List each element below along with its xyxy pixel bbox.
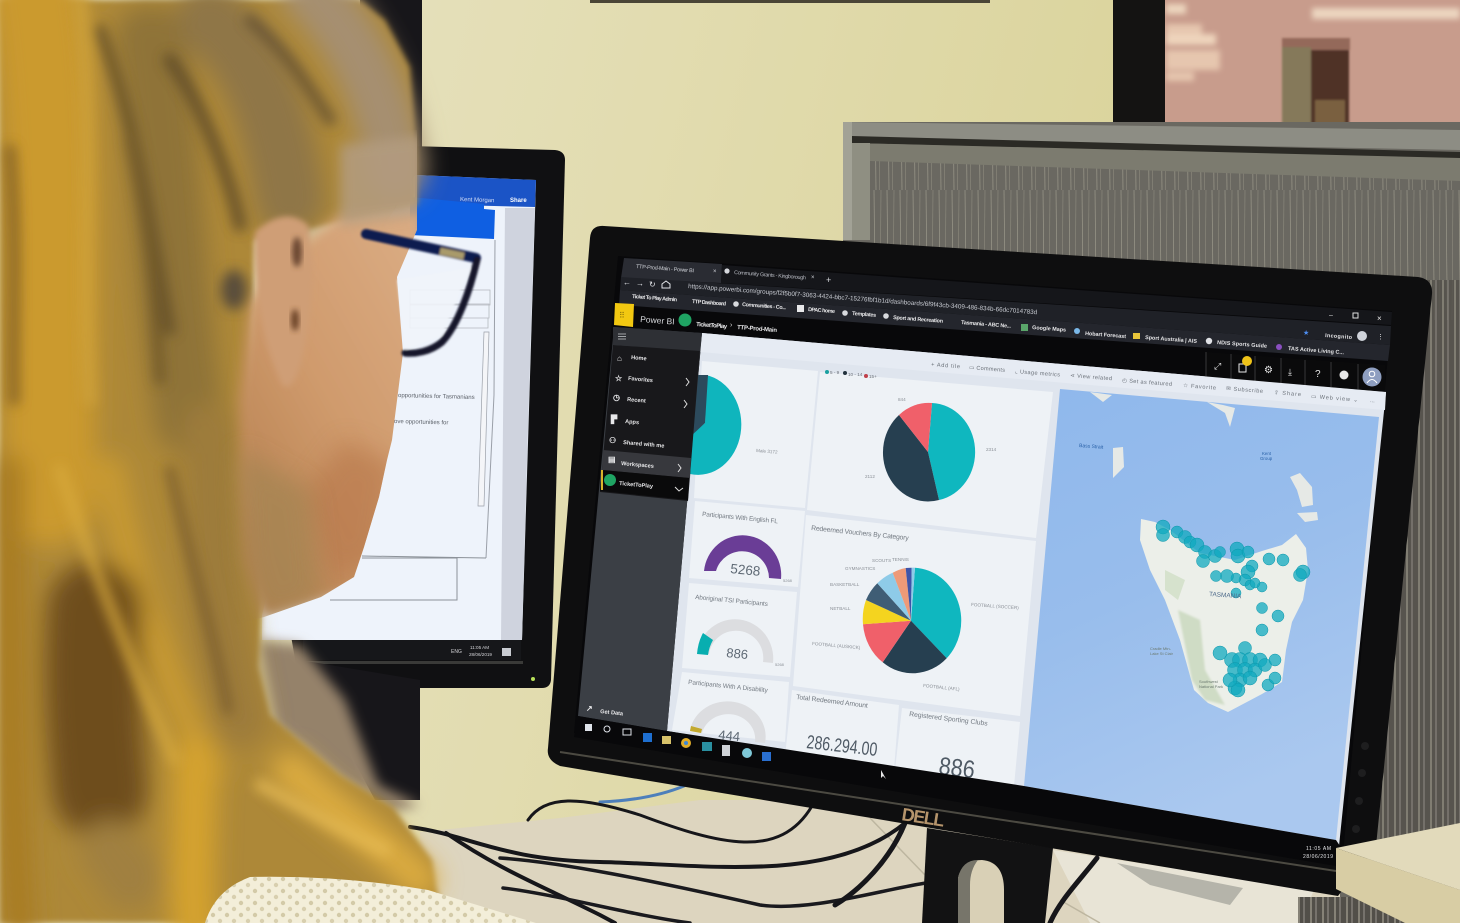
tab strip: × — [713, 269, 717, 275]
tile: registered sporting clubs — [895, 708, 1020, 786]
map tile — [1024, 389, 1379, 840]
tile: redeemed vouchers by category pie: NETBALL — [830, 606, 851, 611]
desk — [420, 800, 1340, 923]
Power BI sidebar: ▛ — [610, 414, 618, 425]
left monitor screen: ove opportunities for — [394, 419, 448, 426]
Power BI sidebar: Shared with me — [623, 440, 665, 450]
tile: participants with English FL gauge: 5268 — [783, 578, 793, 583]
tab strip: TTP-Prod-Main - Power BI — [636, 264, 694, 274]
Windows taskbar — [574, 716, 1340, 866]
left monitor screen: Kent Morgan — [460, 197, 494, 204]
left monitor taskbar: ENG — [451, 649, 462, 655]
tile: gender pie: Male 3172 — [756, 448, 778, 455]
Power BI header: ⠿ — [619, 311, 625, 320]
tile: gender pie — [685, 361, 818, 508]
tile: participants with English FL gauge — [689, 501, 805, 587]
map labels: Lake St Clair — [1150, 651, 1174, 656]
dashboard toolbar: ⇪ Share — [1274, 389, 1301, 398]
bookmarks bar: Communities - Co... — [742, 302, 787, 311]
bezel silver strip — [560, 752, 1336, 871]
left monitor taskbar: 11:05 AM — [470, 645, 489, 650]
dashboard toolbar: ⌞ Usage metrics — [1015, 369, 1060, 379]
left monitor taskbar — [303, 640, 523, 664]
tile: total redeemed amount: Total Redeemed Amount — [796, 694, 868, 710]
bookmarks bar: ⋮ — [1377, 334, 1384, 341]
lace top — [205, 877, 536, 923]
map labels — [1079, 443, 1273, 689]
main monitor stand — [922, 828, 1053, 923]
bookmarks bar: ★ — [1303, 329, 1309, 337]
left monitor bezel — [290, 146, 565, 688]
Power BI sidebar — [578, 327, 702, 731]
Power BI header: › — [730, 322, 733, 329]
address bar: ↻ — [649, 280, 656, 289]
dark post behind head — [360, 0, 422, 160]
Power BI sidebar: ⌂ — [617, 354, 622, 363]
tile: age group pie — [807, 370, 1053, 538]
tile: redeemed vouchers by category pie: BASKETBALL — [830, 582, 860, 587]
shelf edge at the top — [590, 0, 990, 3]
tile: redeemed vouchers by category pie: FOOTBALL (SOCCER) — [971, 602, 1019, 610]
browser chrome — [619, 258, 1392, 361]
tile: redeemed vouchers by category pie: Redeemed Vouchers By Category — [811, 525, 910, 542]
address bar: → — [636, 279, 644, 288]
Power BI sidebar: Favorites — [628, 376, 653, 384]
map labels: Group — [1260, 456, 1273, 461]
bookmarks bar: Tasmania - ABC Ne... — [961, 320, 1012, 330]
tile: total redeemed amount: 286.294.00 — [805, 732, 878, 761]
bookmarks bar: – — [1329, 312, 1333, 319]
tile: redeemed vouchers by category pie: FOOTBALL (AFL) — [923, 683, 960, 692]
address bar — [620, 277, 1391, 345]
bookmarks bar: Google Maps — [1032, 325, 1066, 334]
tile: age group pie: 2314 — [986, 447, 997, 452]
Windows taskbar: 11:05 AM — [1306, 846, 1331, 852]
cables — [410, 786, 1097, 923]
Power BI sidebar: ↗ — [586, 704, 593, 713]
window with brick building — [1160, 0, 1460, 132]
tile: redeemed vouchers by category pie: GYMNASTICS — [845, 566, 875, 571]
tile: registered sporting clubs: Registered Sporting Clubs — [909, 711, 989, 728]
tile: redeemed vouchers by category pie: SCOUTS — [872, 558, 891, 563]
Power BI sidebar: TicketToPlay — [619, 481, 654, 490]
Power BI header — [614, 303, 778, 334]
Power BI sidebar: Recent — [627, 397, 646, 405]
top-right action icons — [1205, 352, 1385, 392]
left monitor screen — [262, 175, 536, 640]
tile: age group pie: 2112 — [865, 474, 875, 479]
Dell logo: DELL — [900, 804, 946, 831]
woman — [0, 0, 536, 923]
tile: Aboriginal TSI participants gauge: Aboriginal TSI Participants — [695, 594, 768, 608]
tile: age group pie: 844 — [898, 397, 906, 402]
map islands — [1090, 392, 1318, 522]
tile: participants with a disability gauge: Participants With A Disability — [688, 679, 769, 694]
bookmarks bar: Sport and Recreation — [893, 315, 943, 325]
bookmarks bar: × — [1377, 314, 1382, 323]
bookmarks bar: TAS Active Living C... — [1288, 346, 1345, 356]
dashboard canvas — [667, 333, 1386, 846]
dashboard toolbar: ☆ Favorite — [1183, 382, 1216, 392]
tile: Aboriginal TSI participants gauge: 886 — [726, 645, 749, 662]
left monitor screen: Share — [510, 198, 527, 204]
cream object lower right — [1336, 823, 1460, 923]
tile: participants with English FL gauge: Participants With English FL — [702, 511, 779, 525]
tile: redeemed vouchers by category pie — [793, 515, 1036, 716]
hair — [0, 0, 448, 923]
dashboard toolbar: ▭ Comments — [969, 365, 1005, 374]
partition wall — [843, 122, 1460, 920]
window frame post — [1113, 0, 1165, 126]
map labels: Cradle Mtn- — [1150, 646, 1172, 651]
Power BI header: Power BI — [640, 314, 675, 327]
map labels: TASMANIA — [1209, 591, 1242, 600]
tab strip: + — [826, 275, 831, 285]
Power BI sidebar: ◷ — [613, 393, 620, 402]
bookmarks bar — [619, 290, 1390, 361]
dashboard toolbar: ◴ Set as featured — [1122, 378, 1172, 388]
address bar: ← — [623, 278, 631, 287]
bookmarks bar: Sport Australia | AIS — [1145, 335, 1198, 345]
tile: Aboriginal TSI participants gauge — [682, 583, 797, 677]
glasses — [366, 234, 477, 353]
tab strip — [621, 258, 1392, 325]
Power BI sidebar: Get Data — [600, 709, 624, 717]
address bar: https://app.powerbi.com/groups/f2f5b0f7-3063-4424-bbc7-15276fbf1b1d/dashboards/6f9f43cb-3409-486-834b-66dc7014783d — [688, 283, 1038, 316]
map labels: Bass Strait — [1079, 443, 1104, 451]
left monitor — [262, 146, 565, 688]
tab strip: × — [811, 275, 815, 281]
monitor screen — [574, 256, 1392, 866]
tile: age group pie: 10 - 14 — [848, 372, 863, 377]
top-right action icons: ⚙ — [1264, 365, 1273, 376]
bookmarks bar: Incognito — [1325, 333, 1353, 341]
dashboard toolbar: ... — [1370, 398, 1375, 404]
tile: redeemed vouchers by category pie: TENNIS — [892, 557, 909, 562]
bookmarks bar: Templates — [852, 311, 876, 319]
tile: registered sporting clubs: 886 — [937, 752, 976, 784]
map data points — [1156, 520, 1310, 697]
face and neck — [238, 135, 425, 620]
dashboard toolbar — [700, 333, 1386, 410]
Power BI sidebar: Apps — [625, 419, 639, 426]
Power BI sidebar: ⚇ — [609, 436, 616, 445]
top-right action icons: ⤓ — [1288, 367, 1292, 377]
bookmarks bar: Ticket To Play Admin — [632, 294, 677, 303]
bezel buttons — [1352, 742, 1369, 833]
tile: participants with a disability gauge — [672, 672, 789, 744]
tile: total redeemed amount — [785, 690, 899, 770]
Power BI sidebar: ☆ — [615, 374, 623, 383]
lower right partition stripes — [1298, 897, 1410, 923]
Power BI header: TicketToPlay — [696, 322, 728, 330]
tile: age group pie: 5 - 9 — [830, 370, 840, 375]
tile: participants with English FL gauge: 5268 — [730, 561, 761, 579]
top-right action icons: ? — [1315, 369, 1321, 380]
left monitor stand — [300, 660, 420, 800]
dashboard toolbar: + Add tile — [931, 362, 960, 370]
left monitor taskbar: 28/06/2019 — [469, 652, 492, 657]
monitor bezel — [548, 226, 1432, 896]
Windows taskbar: 28/06/2019 — [1303, 854, 1333, 860]
map labels: Southwest — [1199, 679, 1219, 684]
tile: age group pie: 15+ — [869, 374, 877, 379]
tile: participants with a disability gauge: 444 — [718, 727, 741, 744]
ear — [221, 216, 312, 387]
dashboard toolbar: ▭ Web view ⌄ — [1311, 394, 1358, 404]
translucent hair strands by the neck — [258, 640, 420, 812]
main monitor — [548, 226, 1432, 896]
tab strip: Community Grants - Kingborough — [734, 270, 806, 281]
dashboard toolbar: ⋖ View related — [1070, 373, 1112, 382]
map labels: Kent — [1262, 451, 1272, 456]
bookmarks bar: TTP Dashboard — [692, 299, 726, 308]
Tasmania land — [1140, 519, 1308, 712]
bookmarks bar: DPAC home — [808, 307, 835, 315]
bookmarks bar: Hobart Forecast — [1085, 331, 1126, 340]
Power BI sidebar: Home — [631, 355, 647, 362]
left monitor screen: opportunities for Tasmanians — [398, 393, 475, 401]
tile: redeemed vouchers by category pie: FOOTBALL (AUSKICK) — [812, 641, 861, 650]
bookmarks bar: NDIS Sports Guide — [1217, 340, 1267, 350]
Power BI header: TTP-Prod-Main — [737, 325, 778, 334]
top-right action icons: ⤢ — [1213, 361, 1221, 371]
Power BI sidebar: ▤ — [608, 455, 616, 464]
Power BI sidebar: Workspaces — [621, 461, 654, 470]
tile: Aboriginal TSI participants gauge: 5268 — [775, 662, 785, 667]
dashboard toolbar: ✉ Subscribe — [1226, 386, 1263, 395]
map labels: National Park — [1199, 684, 1223, 689]
